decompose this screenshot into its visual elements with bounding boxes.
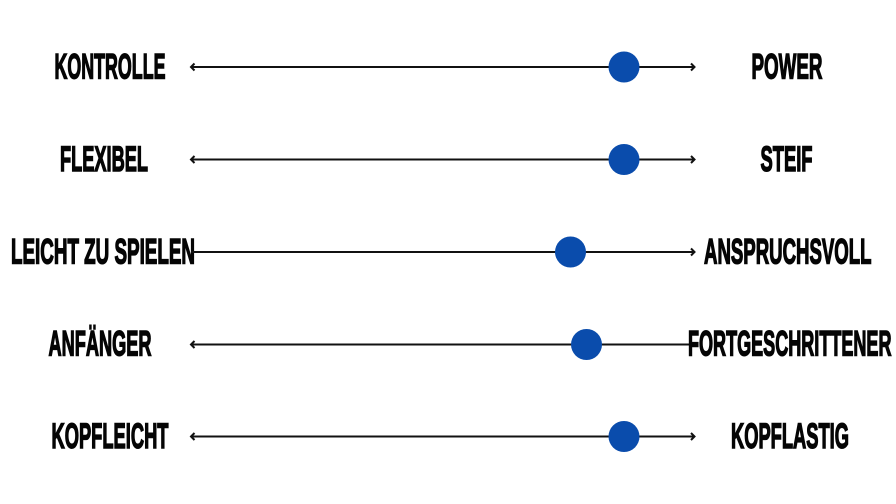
label: Kopfleicht: KOPFLEICHT bbox=[52, 416, 169, 456]
row: Kopfleicht to Kopflastig bbox=[52, 416, 849, 456]
label: Kontrolle: KONTROLLE bbox=[54, 46, 166, 86]
double arrow bbox=[191, 248, 694, 256]
slider dot bbox=[555, 236, 586, 268]
row: Kontrolle to Power bbox=[54, 46, 822, 86]
label: Power: POWER bbox=[752, 46, 822, 86]
slider dot bbox=[608, 52, 640, 82]
slider dot bbox=[608, 421, 640, 452]
label: Leicht zu spielen: LEICHT ZU SPIELEN bbox=[11, 232, 195, 272]
row: Flexibel to Steif bbox=[60, 139, 812, 179]
double arrow bbox=[191, 433, 694, 440]
double arrow bbox=[191, 341, 694, 348]
double arrow bbox=[191, 156, 694, 163]
row: Leicht zu spielen to Anspruchsvoll bbox=[11, 232, 872, 272]
slider dot bbox=[571, 329, 602, 360]
row: Anfänger to Fortgeschrittener bbox=[48, 324, 892, 364]
slider dot bbox=[608, 144, 640, 175]
label: Flexibel: FLEXIBEL bbox=[60, 139, 148, 179]
label: Anfänger: ANFÄNGER bbox=[48, 324, 152, 364]
double arrow bbox=[191, 64, 694, 70]
label: Steif: STEIF bbox=[760, 139, 812, 179]
